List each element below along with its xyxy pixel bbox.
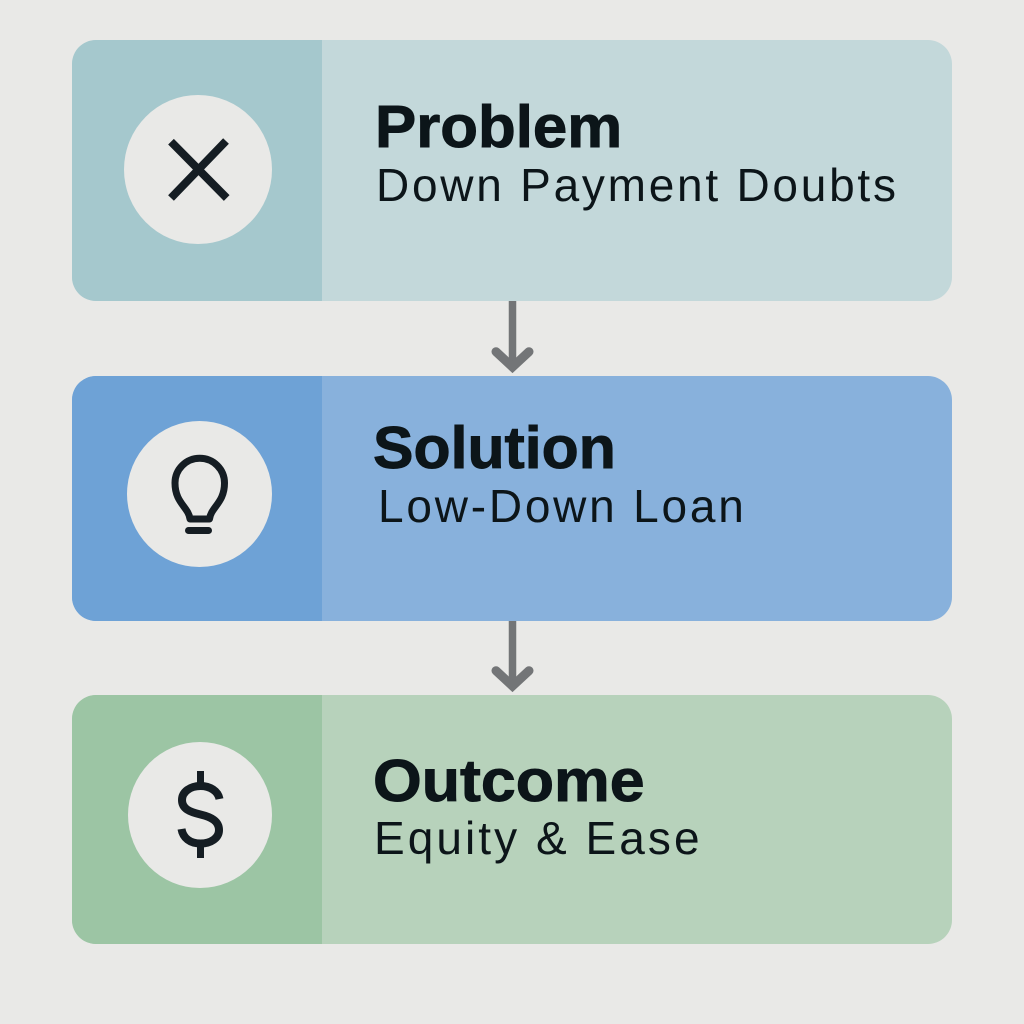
problem icon column (72, 40, 322, 301)
icon: light bulb (172, 454, 228, 534)
outcome icon circle (128, 742, 272, 888)
arrow: problem to solution (492, 301, 534, 373)
problem heading: Problem (375, 94, 622, 160)
arrow: solution to outcome (492, 621, 534, 692)
solution subtitle: Low-Down Loan (378, 480, 747, 532)
panel: problem (72, 40, 952, 301)
outcome heading: Outcome (373, 748, 645, 814)
solution icon column (72, 376, 322, 621)
problem icon circle (124, 95, 272, 244)
panel: outcome (72, 695, 952, 944)
panel: solution (72, 376, 952, 621)
outcome icon column (72, 695, 322, 944)
solution icon circle (127, 421, 272, 567)
solution heading: Solution (373, 415, 616, 481)
outcome subtitle: Equity & Ease (374, 812, 703, 864)
icon: cross (168, 138, 230, 201)
problem subtitle: Down Payment Doubts (376, 159, 899, 211)
icon: dollar sign (178, 771, 224, 858)
